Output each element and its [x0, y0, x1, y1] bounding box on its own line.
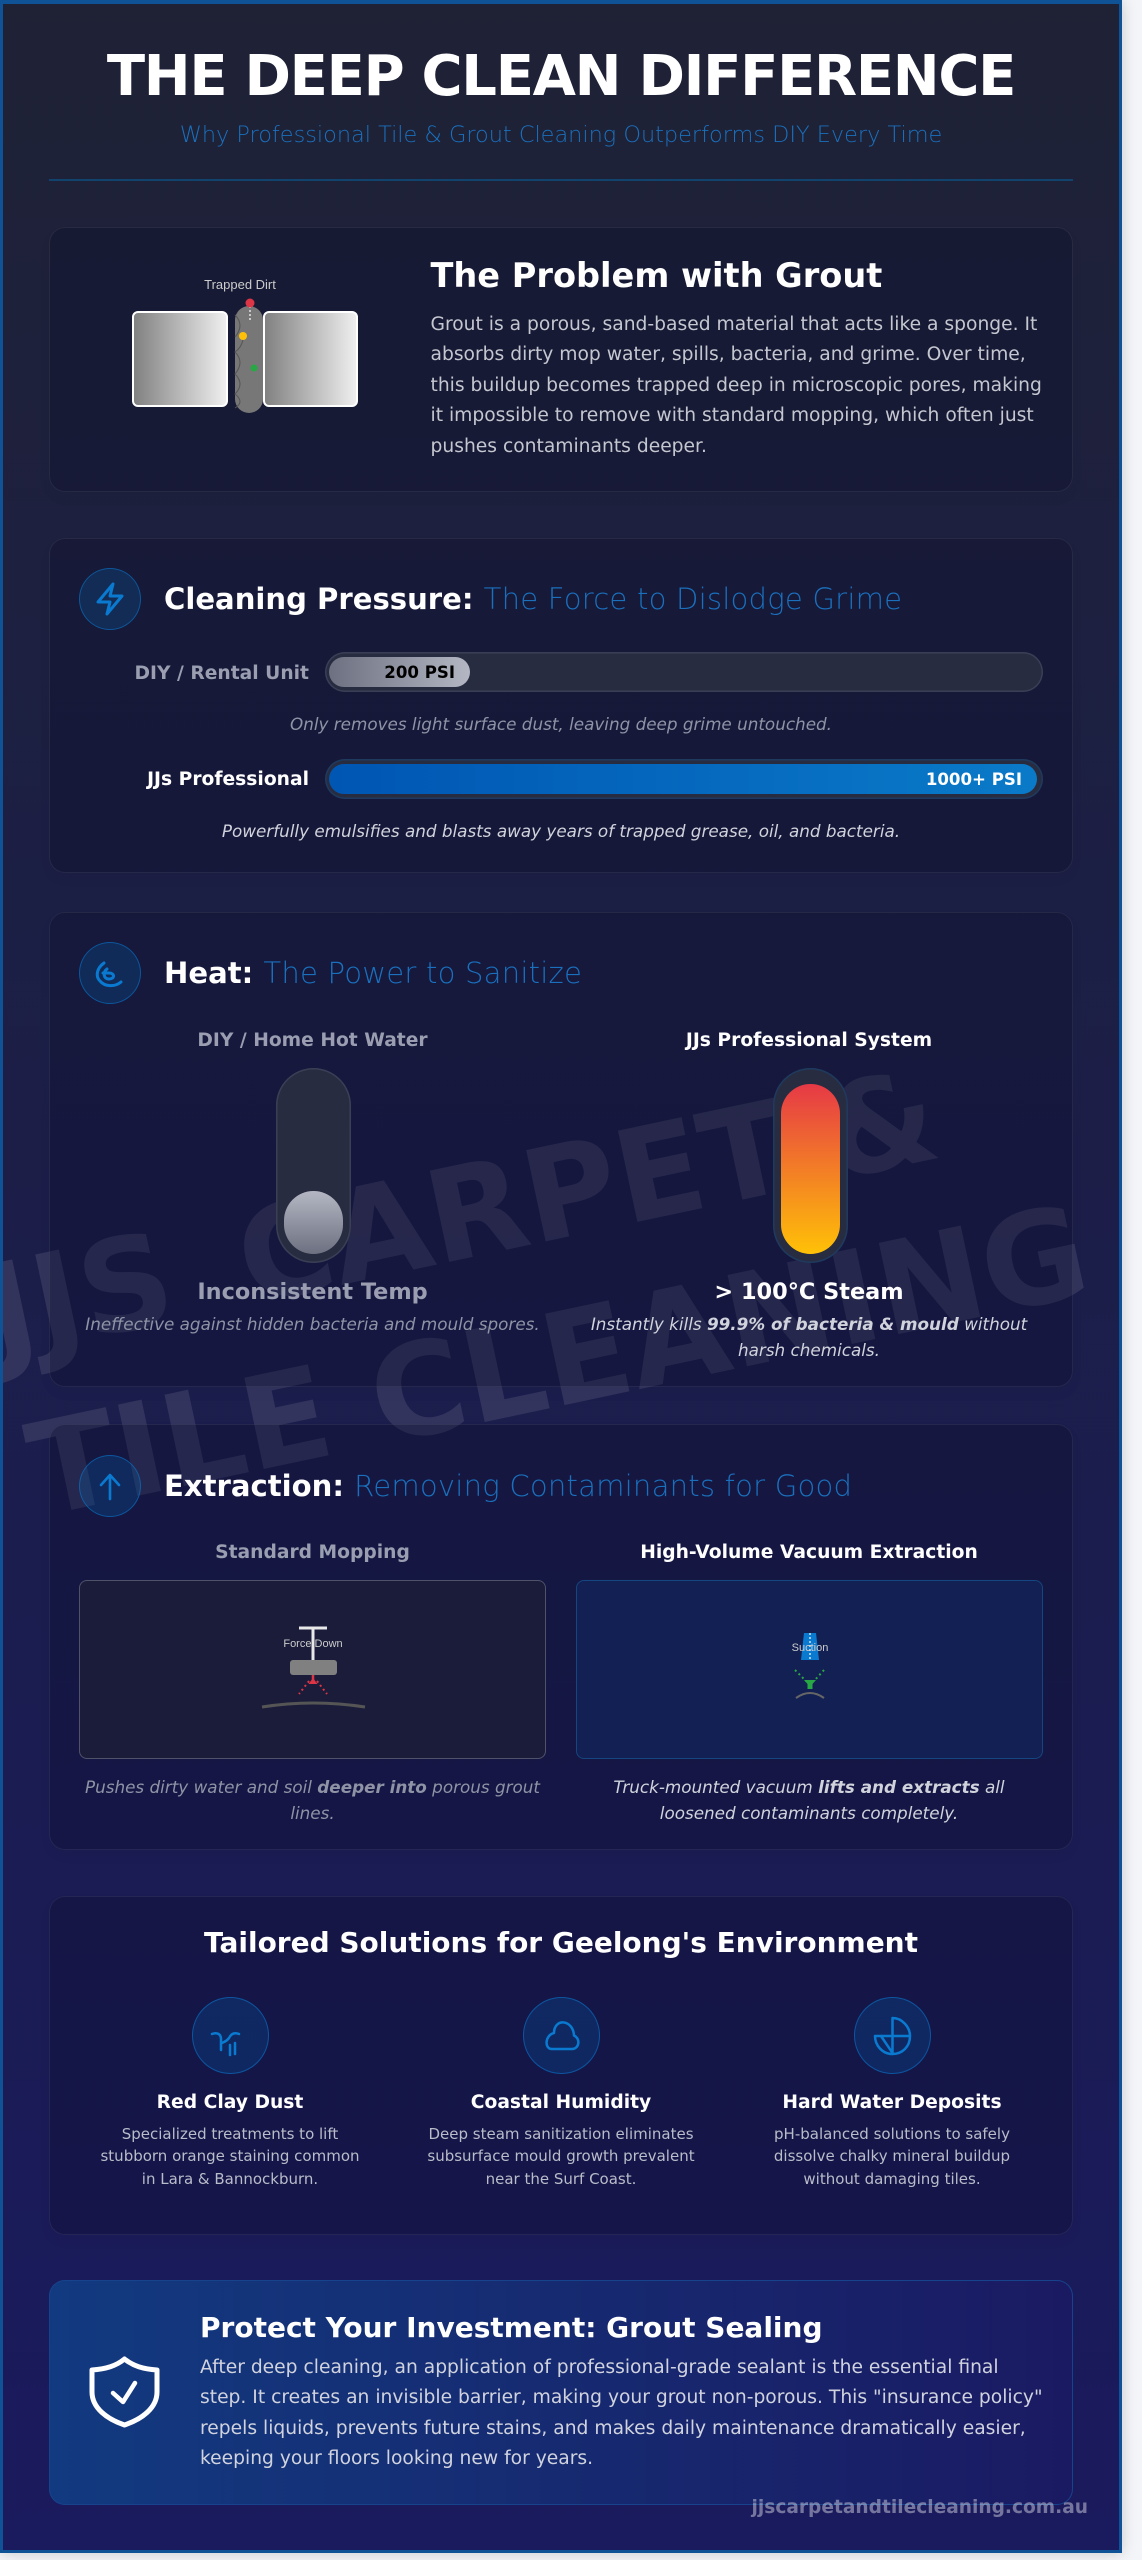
DIY pressure bar: [325, 652, 1043, 692]
vacuum diagram: Suction: [792, 1642, 828, 1654]
solution: hard water name: Hard Water Deposits: [782, 2092, 1002, 2113]
solution: hard water text: without damaging tiles.: [803, 2170, 981, 2188]
solution: hard water text: [774, 2125, 1010, 2188]
mop diagram: [262, 1626, 366, 1708]
icon: cloud: [522, 1997, 600, 2074]
icon: heat swirl: [79, 942, 141, 1004]
section heading: Cleaning Pressure: The Force to Dislodge Grime: [164, 582, 902, 616]
DIY note: Only removes light surface dust, leaving deep grime untouched.: [290, 714, 832, 734]
icon: up arrow: [79, 1455, 141, 1517]
professional column label: JJs Professional System: [686, 1030, 932, 1051]
mopping note: lines.: [290, 1803, 335, 1823]
watermark: TILE CLEANING: [16, 1176, 1101, 1546]
body text: Grout is a porous, sand-based material that acts like a sponge. It: [430, 314, 1037, 335]
subtitle: Why Professional Tile & Grout Cleaning Outperforms DIY Every Time: [180, 122, 942, 148]
panel: extraction: [49, 1424, 1073, 1850]
section heading: Extraction: Removing Contaminants for Good: [164, 1469, 852, 1503]
body text: [430, 314, 1042, 457]
icon: lightning: [79, 568, 141, 630]
professional result: > 100°C Steam: [714, 1279, 904, 1305]
DIY thermometer: [276, 1068, 351, 1263]
professional note: Powerfully emulsifies and blasts away years of trapped grease, oil, and bacteria.: [222, 821, 900, 841]
vacuum note: [613, 1777, 1005, 1823]
grout cross-section illustration: Trapped Dirt: [204, 277, 276, 292]
mopping illustration box: [79, 1580, 546, 1759]
professional level: [781, 1084, 840, 1254]
solution: hard water text: dissolve chalky mineral buildup: [774, 2147, 1010, 2165]
solution: hard water text: pH-balanced solutions to safely: [774, 2125, 1010, 2143]
DIY result: Inconsistent Temp: [197, 1279, 428, 1305]
professional note: harsh chemicals.: [738, 1340, 880, 1360]
watermark: JJS CARPET &: [0, 1041, 950, 1388]
solution: red clay text: [100, 2125, 360, 2188]
grout cross-section illustration: [132, 277, 358, 413]
icon: clay: [192, 1997, 268, 2074]
panel: heat: [49, 912, 1073, 1387]
solution: red clay name: Red Clay Dust: [157, 2092, 303, 2113]
solution: coastal text: [427, 2125, 695, 2188]
professional fill: [329, 764, 1037, 794]
footer website: jjscarpetandtilecleaning.com.au: [752, 2497, 1088, 2518]
body text: keeping your floors looking new for years.: [200, 2448, 593, 2469]
professional pressure bar: [325, 759, 1043, 799]
mopping label: Standard Mopping: [215, 1542, 410, 1563]
vacuum note: loosened contaminants completely.: [660, 1803, 958, 1823]
solution: red clay text: Specialized treatments to lift: [122, 2125, 338, 2143]
heading: The Problem with Grout: [430, 256, 882, 295]
solution: red clay text: stubborn orange staining common: [100, 2147, 360, 2165]
DIY label: DIY / Rental Unit: [135, 663, 309, 684]
vacuum label: High-Volume Vacuum Extraction: [640, 1542, 978, 1563]
icon: mineral pie: [854, 1997, 930, 2074]
professional note: [591, 1314, 1028, 1360]
solution: red clay text: in Lara & Bannockburn.: [142, 2170, 318, 2188]
vacuum illustration box: [576, 1580, 1043, 1759]
vacuum note: Truck-mounted vacuum lifts and extracts all: [613, 1777, 1005, 1797]
title: THE DEEP CLEAN DIFFERENCE: [107, 44, 1015, 109]
body text: After deep cleaning, an application of professional-grade sealant is the essential final: [200, 2357, 999, 2378]
mopping note: [85, 1777, 540, 1823]
body text: step. It creates an invisible barrier, making your grout non-porous. This "insurance policy": [200, 2387, 1043, 2408]
DIY note: Ineffective against hidden bacteria and mould spores.: [85, 1314, 540, 1334]
panel: tailored solutions: [49, 1896, 1073, 2235]
panel: grout sealing: [49, 2280, 1073, 2505]
heading: Tailored Solutions for Geelong's Environment: [204, 1926, 918, 1959]
DIY fill: 200 PSI: [384, 663, 455, 682]
body text: repels liquids, prevents future stains, and makes daily maintenance dramatically easier,: [200, 2418, 1026, 2439]
mop diagram: Force Down: [283, 1638, 343, 1650]
professional fill: 1000+ PSI: [926, 770, 1022, 789]
body text: pushes contaminants deeper.: [430, 436, 707, 457]
body text: [200, 2357, 1043, 2469]
professional label: JJs Professional: [147, 769, 309, 790]
professional note: Instantly kills 99.9% of bacteria & mould without: [591, 1314, 1027, 1334]
heading: Protect Your Investment: Grout Sealing: [200, 2311, 822, 2344]
panel: cleaning pressure: [49, 538, 1073, 873]
icon: shield: [90, 2356, 160, 2428]
DIY level: [284, 1191, 343, 1254]
section heading: Heat: The Power to Sanitize: [164, 956, 582, 990]
DIY fill: [329, 657, 470, 687]
body text: this buildup becomes trapped deep in microscopic pores, making: [430, 375, 1042, 396]
solution: coastal text: subsurface mould growth prevalent: [427, 2147, 695, 2165]
body text: it impossible to remove with standard mopping, which often just: [430, 405, 1034, 426]
DIY column label: DIY / Home Hot Water: [197, 1030, 428, 1051]
vacuum diagram: [792, 1633, 828, 1699]
solution: coastal name: Coastal Humidity: [471, 2092, 651, 2113]
mopping note: Pushes dirty water and soil deeper into porous grout: [85, 1777, 540, 1797]
solution: coastal text: Deep steam sanitization eliminates: [428, 2125, 694, 2143]
panel: the problem with grout: [49, 227, 1073, 492]
professional thermometer: [773, 1068, 848, 1263]
body text: absorbs dirty mop water, spills, bacteria, and grime. Over time,: [430, 344, 1026, 365]
solution: coastal text: near the Surf Coast.: [486, 2170, 636, 2188]
